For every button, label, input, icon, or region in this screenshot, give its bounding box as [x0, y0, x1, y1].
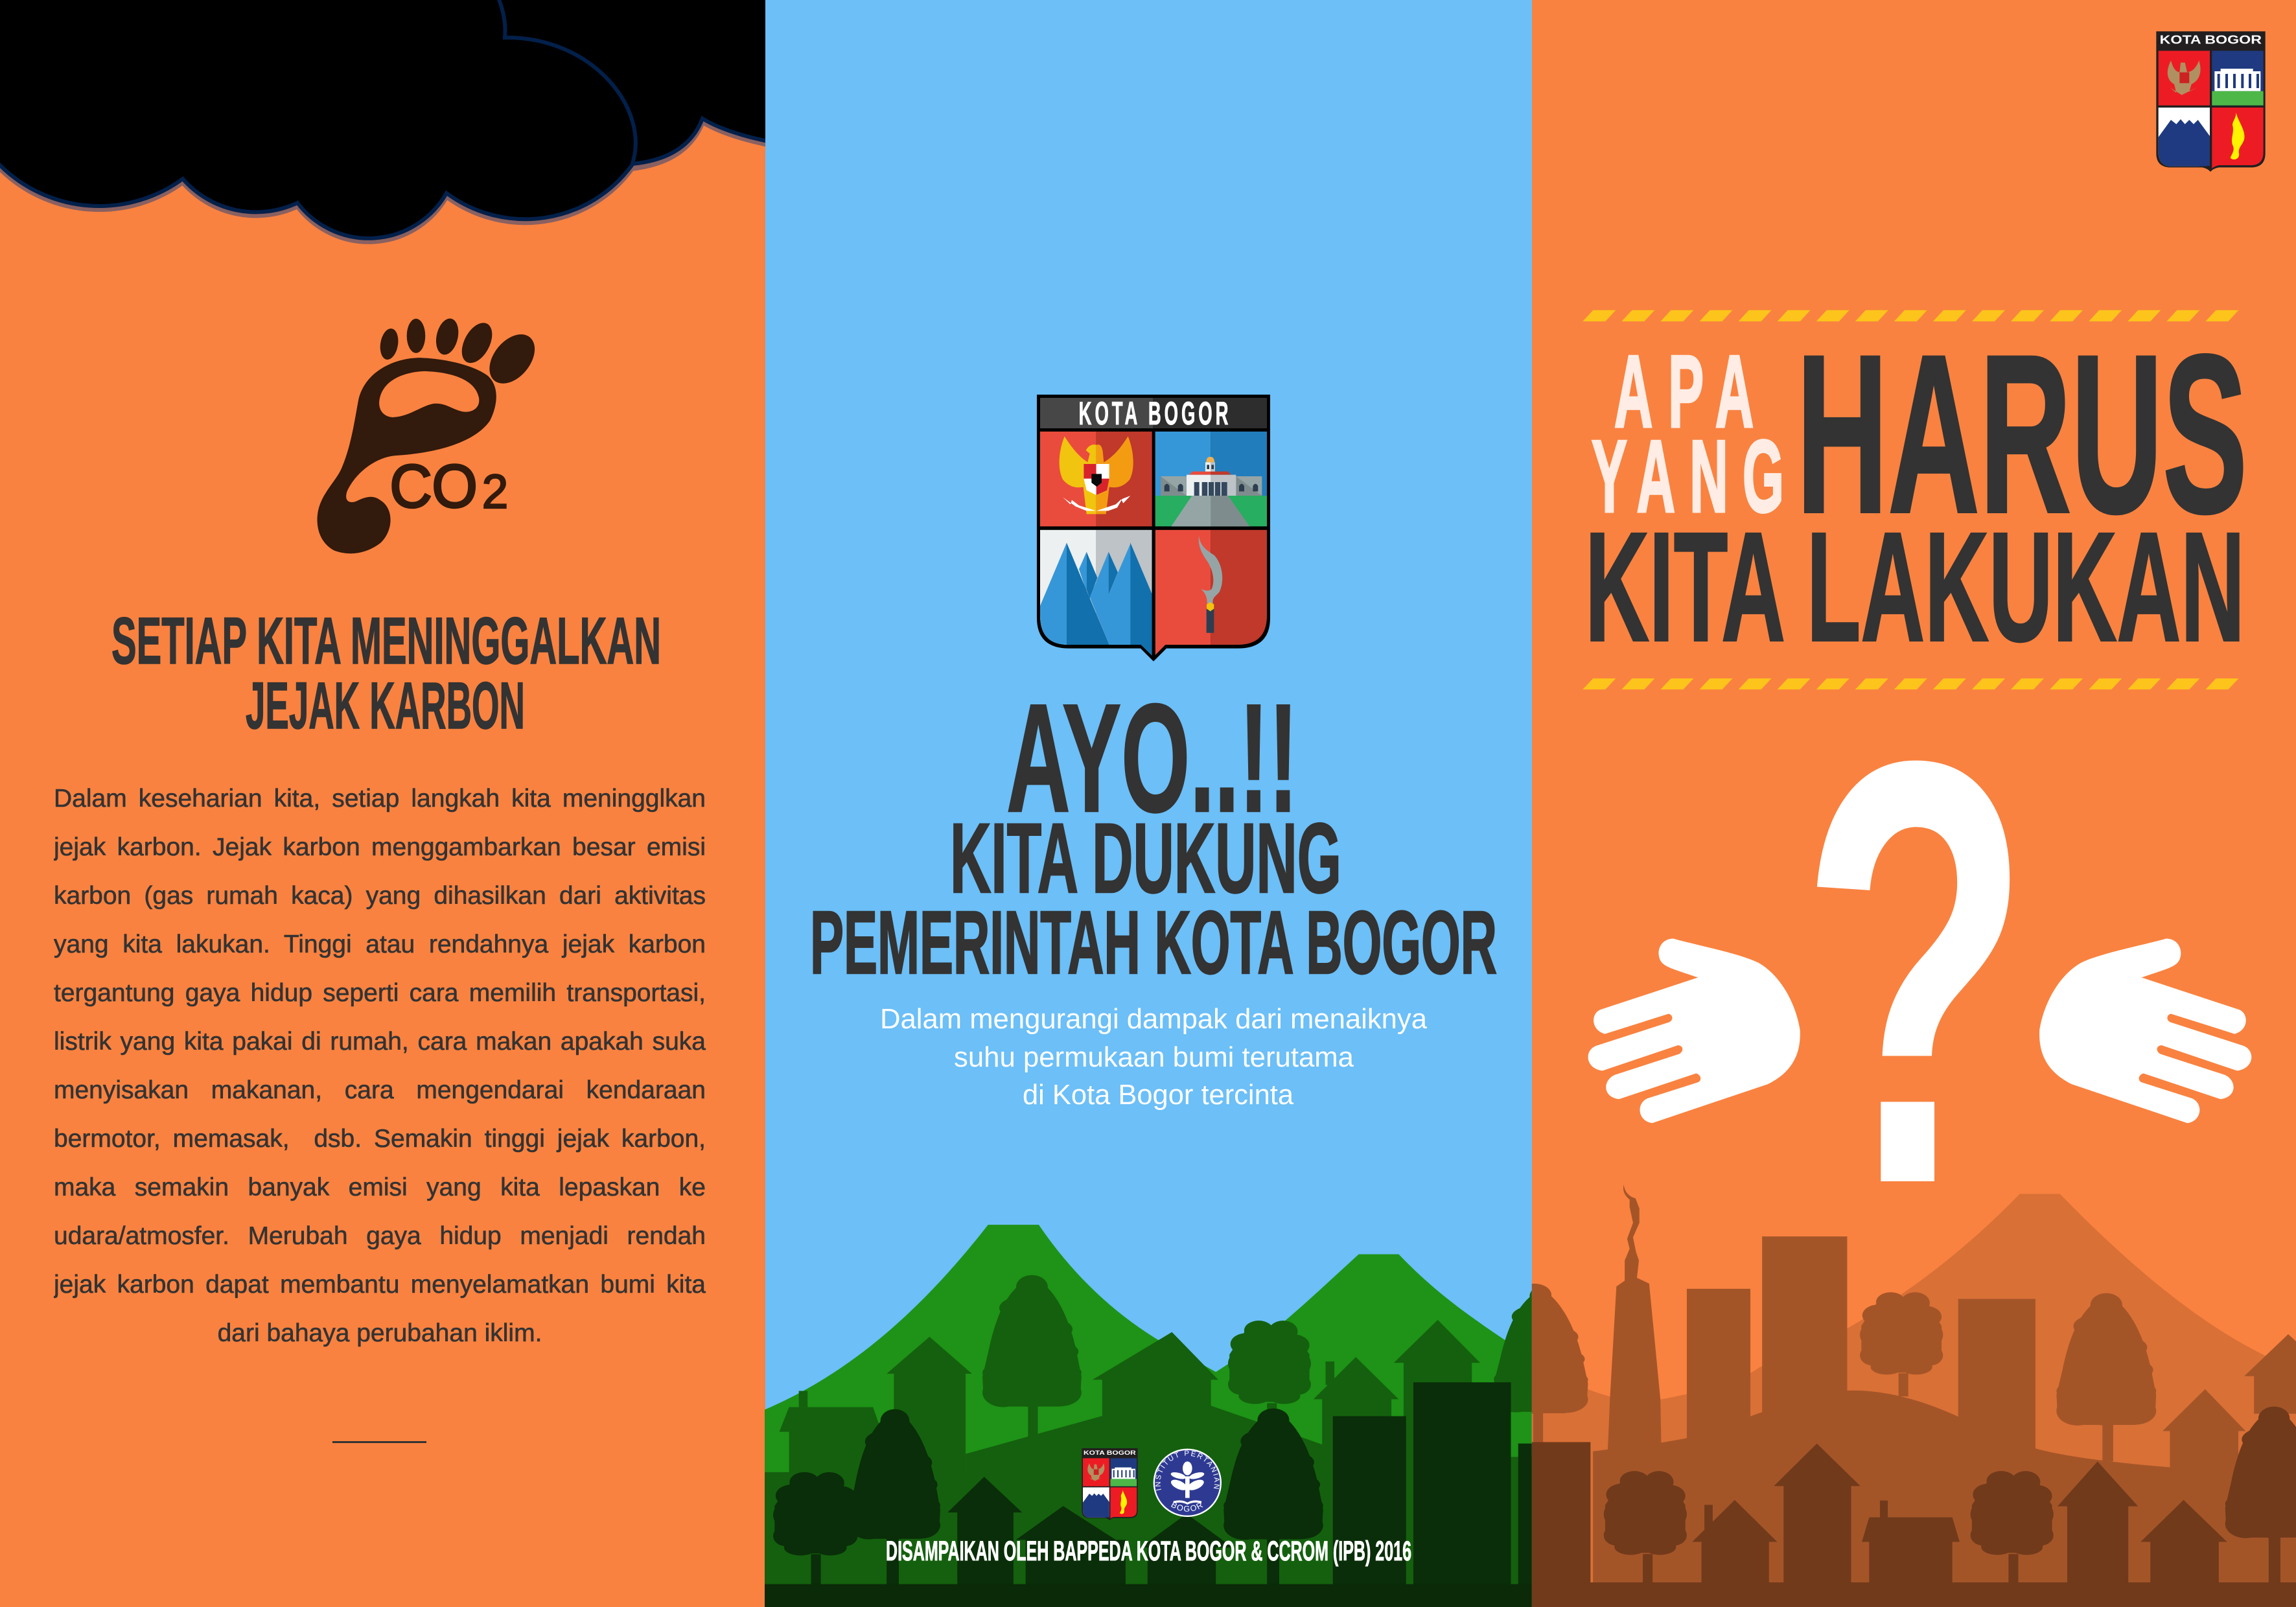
text block: carbon footprint explanation: dari bahaya perubahan iklim. [218, 1319, 542, 1347]
icon: CO2 footprint: CO [389, 452, 478, 520]
icon: open hands [1588, 938, 2251, 1123]
logo: Kota Bogor small footer crest [1082, 1448, 1138, 1520]
heading: jejak karbon: SETIAP KITA MENINGGALKAN [111, 604, 661, 678]
logo: IPB round emblem [1154, 1449, 1222, 1517]
heading: jejak karbon: JEJAK KARBON [246, 669, 525, 743]
icon: question mark: ? [1800, 636, 2032, 1309]
text block: carbon footprint explanation [54, 774, 708, 1364]
heading: ayo kita dukung: KITA DUKUNG [950, 803, 1341, 914]
logo: Kota Bogor small footer crest: KOTA BOGOR [1084, 1449, 1136, 1456]
heading: jejak karbon [111, 604, 661, 743]
logo: Kota Bogor large shield [1037, 395, 1270, 662]
text block: carbon footprint explanation: yang kita lakukan. Tinggi atau rendahnya jejak karbon [54, 931, 706, 958]
text block: carbon footprint explanation: bermotor, memasak, dsb. Semakin tinggi jejak karbon, [54, 1125, 706, 1153]
text block: carbon footprint explanation: karbon (gas rumah kaca) yang dihasilkan dari aktivitas [54, 882, 706, 910]
heading: ayo kita dukung [810, 673, 1497, 993]
text block: middle subtitle: Dalam mengurangi dampak dari menaiknya [880, 1003, 1428, 1035]
text: presented by credit line: DISAMPAIKAN OLEH BAPPEDA KOTA BOGOR & CCROM (IPB) 2016 [886, 1536, 1411, 1567]
text block: middle subtitle [880, 1003, 1428, 1111]
heading: ayo kita dukung: AYO..!! [1006, 673, 1298, 844]
logo: Kota Bogor top-right crest [2156, 31, 2266, 172]
panel: left carbon footprint [0, 0, 771, 1607]
text block: carbon footprint explanation: maka semakin banyak emisi yang kita lepaskan ke [54, 1173, 706, 1201]
icon: dark smog cloud [0, 0, 771, 242]
text block: carbon footprint explanation: jejak karbon dapat membantu menyelamatkan bumi kita [54, 1271, 706, 1299]
illustration: green city skyline [765, 1225, 1599, 1607]
text block: carbon footprint explanation: jejak karbon. Jejak karbon menggambarkan besar emisi [54, 833, 706, 861]
text block: carbon footprint explanation: tergantung gaya hidup seperti cara memilih transportasi, [54, 979, 706, 1007]
text block: carbon footprint explanation: Dalam keseharian kita, setiap langkah kita meningglkan [54, 785, 706, 813]
heading: apa yang harus kita lakukan: YANG [1592, 419, 1798, 533]
heading: ayo kita dukung: PEMERINTAH KOTA BOGOR [810, 893, 1497, 993]
logo: IPB round emblem: BOGOR [1171, 1502, 1203, 1512]
icon: CO2 footprint: 2 [482, 465, 508, 518]
panel: middle call to action [765, 0, 1625, 1607]
text block: carbon footprint explanation: listrik yang kita pakai di rumah, cara makan apakah suka [54, 1028, 706, 1056]
text block: carbon footprint explanation: menyisakan makanan, cara mengendarai kendaraan [54, 1076, 706, 1104]
logo: Kota Bogor top-right crest: KOTA BOGOR [2160, 33, 2262, 47]
text block: carbon footprint explanation: udara/atmosfer. Merubah gaya hidup menjadi rendah [54, 1222, 706, 1250]
heading: apa yang harus kita lakukan: APA [1614, 334, 1769, 448]
illustration: orange city skyline [1481, 1185, 2296, 1607]
text block: middle subtitle: di Kota Bogor tercinta [1023, 1079, 1294, 1111]
panel: right what must we do [1481, 0, 2296, 1607]
icon: CO2 footprint [318, 318, 544, 553]
heading: apa yang harus kita lakukan [1585, 308, 2247, 674]
logo: Kota Bogor large shield: KOTA BOGOR [1079, 395, 1231, 432]
text block: middle subtitle: suhu permukaan bumi terutama [954, 1041, 1354, 1073]
logo: IPB round emblem: INSTITUT PERTANIAN [1155, 1450, 1220, 1490]
